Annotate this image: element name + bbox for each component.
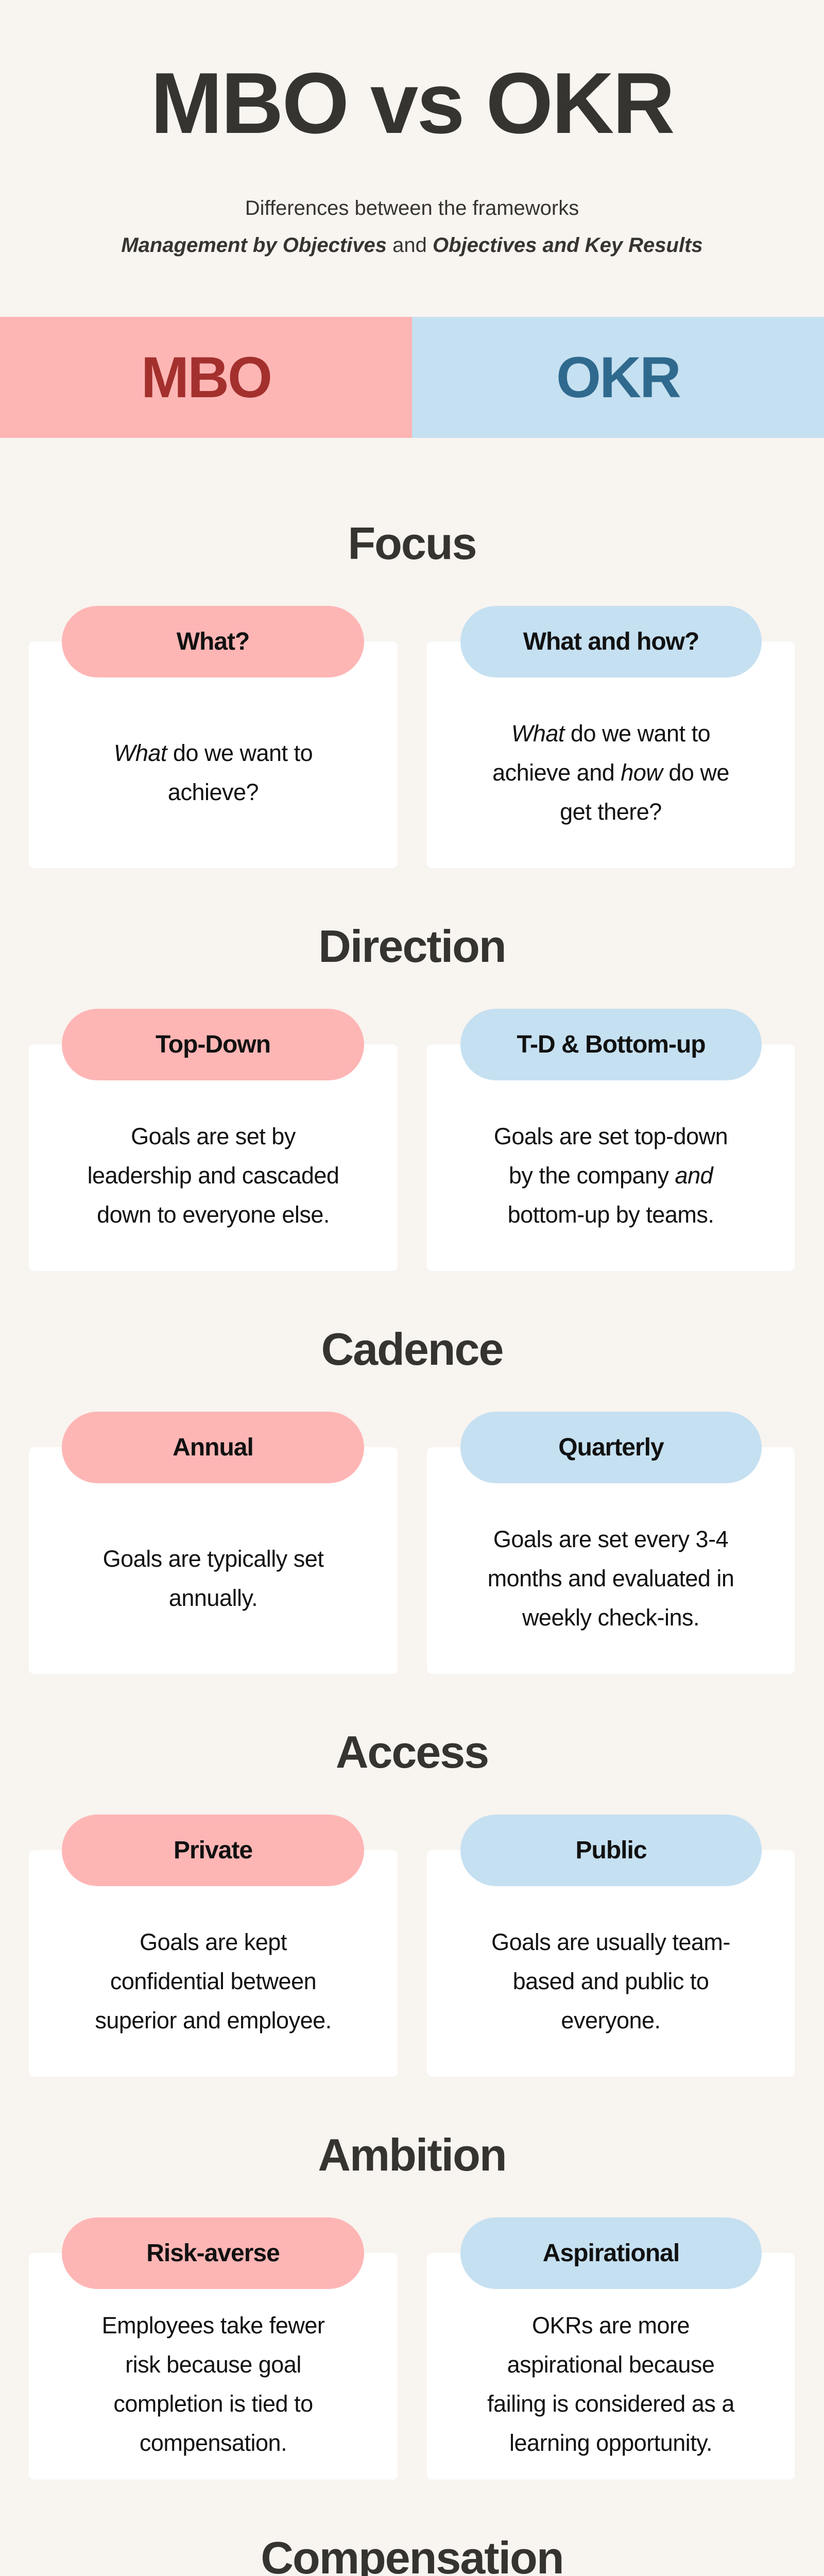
subtitle: Differences between the frameworks	[245, 197, 579, 219]
card: OKR direction: by the company and	[509, 1162, 713, 1189]
pill: Risk-averse	[62, 2217, 364, 2289]
pill: Top-Down	[62, 1009, 364, 1080]
card: MBO ambition	[29, 2253, 398, 2480]
pill: Public	[460, 1815, 762, 1886]
heading: Access: Access	[336, 1726, 488, 1777]
pill: Annual	[62, 1412, 364, 1483]
card: OKR focus: achieve and how do we	[492, 759, 729, 786]
card: MBO focus: What do we want to	[114, 740, 313, 766]
card: MBO access: confidential between	[110, 1968, 316, 1994]
card: MBO ambition: risk because goal	[125, 2351, 301, 2378]
heading: Ambition: Ambition	[318, 2129, 506, 2180]
card: OKR ambition: learning opportunity.	[509, 2430, 712, 2456]
subtitle: Management by Objectives and Objectives and Key Results	[121, 234, 703, 257]
header: OKR: OKR	[556, 345, 680, 410]
card: OKR access: everyone.	[561, 2007, 661, 2033]
card: OKR access: based and public to	[513, 1968, 709, 1994]
card: MBO ambition: compensation.	[140, 2430, 287, 2456]
card: MBO ambition: completion is tied to	[113, 2391, 313, 2417]
card: MBO direction	[29, 1044, 398, 1271]
heading: Direction: Direction	[318, 921, 506, 972]
card: OKR access: Goals are usually team-	[491, 1929, 730, 1955]
card: MBO direction: leadership and cascaded	[88, 1162, 339, 1189]
card: MBO access	[29, 1850, 398, 2077]
pill: What and how?: What and how?	[523, 628, 699, 655]
header: MBO	[0, 317, 412, 438]
card: MBO access: superior and employee.	[95, 2007, 332, 2033]
pill: T-D & Bottom-up: T-D & Bottom-up	[517, 1031, 706, 1058]
card: OKR access	[427, 1850, 795, 2077]
card: OKR direction: bottom-up by teams.	[508, 1201, 714, 1228]
card: OKR ambition: OKRs are more	[532, 2312, 690, 2338]
pill: Annual: Annual	[173, 1434, 253, 1461]
pill: Top-Down: Top-Down	[156, 1031, 270, 1058]
heading: Cadence: Cadence	[321, 1324, 503, 1375]
pill: Quarterly: Quarterly	[558, 1434, 664, 1461]
card: OKR cadence	[427, 1447, 795, 1674]
card: OKR focus: What do we want to	[511, 720, 710, 747]
card: OKR cadence: Goals are set every 3-4	[493, 1526, 728, 1552]
card: MBO cadence	[29, 1447, 398, 1674]
card: OKR focus: get there?	[560, 799, 662, 825]
pill: Quarterly	[460, 1412, 762, 1483]
pill: What?	[62, 606, 364, 677]
card: OKR focus	[427, 641, 795, 868]
pill: Private: Private	[174, 1837, 252, 1864]
pill: Aspirational: Aspirational	[543, 2240, 679, 2267]
card: MBO focus	[29, 641, 398, 868]
card: MBO cadence: annually.	[169, 1585, 258, 1611]
header: MBO: MBO	[141, 345, 271, 410]
pill: Aspirational	[460, 2217, 762, 2289]
heading: Focus: Focus	[348, 518, 476, 569]
card: OKR ambition	[427, 2253, 795, 2480]
card: MBO focus: achieve?	[168, 779, 259, 805]
card: MBO ambition: Employees take fewer	[102, 2312, 324, 2338]
pill: T-D & Bottom-up	[460, 1009, 762, 1080]
card: MBO direction: down to everyone else.	[97, 1201, 330, 1228]
card: MBO access: Goals are kept	[140, 1929, 287, 1955]
pill: What?: What?	[177, 628, 249, 655]
pill: Private	[62, 1815, 364, 1886]
card: OKR cadence: months and evaluated in	[488, 1565, 734, 1591]
header: OKR	[412, 317, 824, 438]
card: MBO cadence: Goals are typically set	[103, 1546, 323, 1572]
pill: Risk-averse: Risk-averse	[146, 2240, 280, 2267]
pill: What and how?	[460, 606, 762, 677]
card: OKR direction: Goals are set top-down	[494, 1123, 728, 1149]
title: MBO vs OKR	[150, 55, 674, 151]
subtitle	[121, 197, 703, 257]
card: OKR ambition: failing is considered as a	[487, 2391, 734, 2417]
card: OKR ambition: aspirational because	[507, 2351, 714, 2378]
card: OKR cadence: weekly check-ins.	[522, 1604, 699, 1631]
card: OKR direction	[427, 1044, 795, 1271]
card: MBO direction: Goals are set by	[131, 1123, 296, 1149]
pill: Public: Public	[575, 1837, 647, 1864]
